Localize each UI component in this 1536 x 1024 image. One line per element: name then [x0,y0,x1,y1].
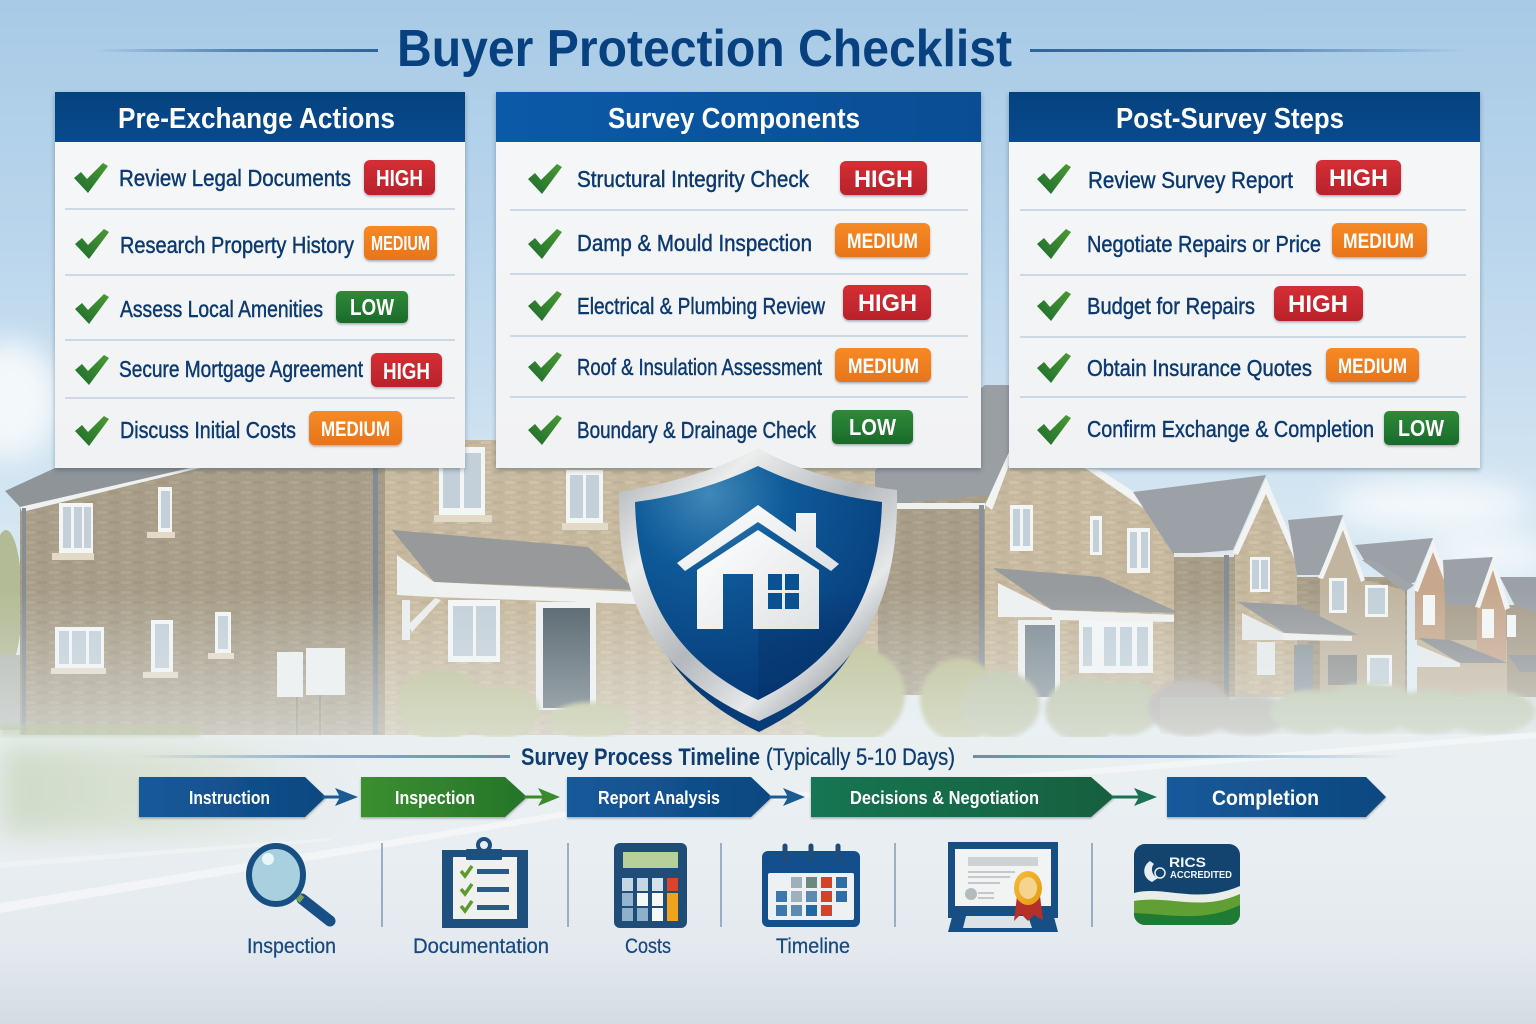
step: decisions and negotiation: Decisions & Negotiation [850,788,1039,808]
heading: pre-exchange actions: Pre-Exchange Actions [118,103,395,135]
item: confirm exchange and completion: Confirm Exchange & Completion [1087,416,1374,442]
left house wall [20,468,385,735]
step: completion [1167,777,1386,817]
timeline heading: Survey Process Timeline [521,744,760,771]
right house B [1133,475,1266,555]
houses C to F [1288,515,1343,575]
item: structural integrity check [528,161,927,195]
right house A [875,385,1010,560]
item: electrical and plumbing review: Electrical & Plumbing Review [577,293,825,319]
icon: RICS accredited badge: RICS [1169,854,1206,870]
item: assess local amenities [75,291,408,324]
heading: survey components [496,92,981,142]
item: research property history [75,226,437,260]
sign boards [277,652,303,697]
item: obtain insurance quotes: MEDIUM [1338,355,1407,378]
background: misty road and verge [0,724,1536,1024]
item: structural integrity check: Structural Integrity Check [577,166,809,192]
item: discuss initial costs [75,411,402,446]
heading: post-survey steps: Post-Survey Steps [1116,103,1344,135]
icon: protection shield with house [619,448,897,732]
icon: RICS accredited badge [1134,844,1240,925]
item: electrical and plumbing review [528,285,931,321]
item: budget for repairs: HIGH [1288,291,1348,318]
item: structural integrity check: HIGH [854,166,913,193]
background: row of brick houses [0,385,1536,745]
step: decisions and negotiation [811,777,1114,817]
item: damp and mould inspection [528,223,930,259]
item: confirm exchange and completion: LOW [1398,415,1444,441]
item: research property history: Research Property History [120,232,354,258]
item: boundary and drainage check: Boundary & Drainage Check [577,417,816,443]
step: inspection [361,777,527,817]
item: obtain insurance quotes [1037,348,1419,383]
arrow: decisions to completion [1111,788,1157,806]
item: confirm exchange and completion [1037,411,1459,445]
item: research property history: MEDIUM [371,233,430,255]
item: roof and insulation assessment: Roof & Insulation Assessment [577,354,822,380]
item: obtain insurance quotes: Obtain Insurance Quotes [1087,355,1312,381]
item: roof and insulation assessment [528,348,931,382]
icon: calendar [762,846,860,927]
porches on far houses [1238,602,1358,635]
item: negotiate repairs or price [1037,223,1427,259]
item: assess local amenities: Assess Local Amenities [120,296,323,322]
item: review legal documents: HIGH [376,165,423,191]
tree at left [0,530,22,670]
item: boundary and drainage check [528,410,913,445]
timeline heading: (Typically 5-10 Days) [766,744,955,771]
item: discuss initial costs: Discuss Initial Costs [120,417,296,443]
heading: pre-exchange actions [55,92,465,142]
title [95,20,1465,78]
corner wall [385,440,880,735]
label: timeline: Timeline [776,935,850,958]
panel: post-survey steps [1009,92,1480,468]
item: budget for repairs: Budget for Repairs [1087,293,1255,319]
item: electrical and plumbing review: HIGH [858,290,917,317]
label: inspection: Inspection [247,935,336,958]
left house windows [55,447,603,672]
house window [768,574,799,609]
item: damp and mould inspection: MEDIUM [847,230,918,253]
item: budget for repairs [1037,286,1363,321]
item: review legal documents [74,160,435,195]
house roof [677,505,839,571]
step: instruction: Instruction [189,788,270,808]
item: review survey report [1037,160,1401,195]
step: inspection: Inspection [395,788,475,808]
item: secure mortgage agreement: Secure Mortgage Agreement [119,356,364,382]
house body [697,530,819,629]
item: negotiate repairs or price: Negotiate Repairs or Price [1087,231,1321,257]
icon: RICS accredited badge: ACCREDITED [1170,870,1232,881]
item: secure mortgage agreement [75,353,442,387]
item: review survey report: HIGH [1329,165,1388,192]
item: boundary and drainage check: LOW [849,414,896,440]
step: report analysis: Report Analysis [598,788,720,808]
timeline heading [135,744,1403,771]
item: damp and mould inspection: Damp & Mould Inspection [577,230,812,256]
arrow: report to decisions [769,788,805,806]
item: review survey report: Review Survey Report [1088,167,1294,193]
panel: pre-exchange actions [55,92,465,468]
label: documentation: Documentation [413,935,549,958]
icon: magnifying glass [249,846,330,921]
item: secure mortgage agreement: HIGH [383,358,430,384]
step: report analysis [567,777,772,817]
icon: checklist clipboard [442,839,528,928]
step: instruction [139,777,326,817]
icon: calculator [614,843,687,928]
item: discuss initial costs: MEDIUM [321,418,390,441]
background: sky with clouds [0,0,1536,760]
item: negotiate repairs or price: MEDIUM [1343,230,1414,253]
porch left [392,530,636,590]
icon: certificate on laptop [948,842,1058,932]
timeline section [135,744,1403,817]
heading: survey components: Survey Components [608,103,860,135]
title: Buyer Protection Checklist [397,20,1012,78]
heading: post-survey steps [1009,92,1480,142]
panel: survey components [496,92,981,468]
step: completion: Completion [1212,787,1319,810]
arrow: inspection to report [524,788,560,806]
icon row dividers [382,843,1092,927]
arrow: instruction to inspection [322,788,358,806]
item: roof and insulation assessment: MEDIUM [848,355,919,378]
label: costs: Costs [625,935,671,958]
item: review legal documents: Review Legal Documents [119,165,351,191]
item: assess local amenities: LOW [350,294,394,320]
shrubs [398,645,1535,745]
mist over lower houses [0,590,1536,737]
left house roof [5,468,190,507]
